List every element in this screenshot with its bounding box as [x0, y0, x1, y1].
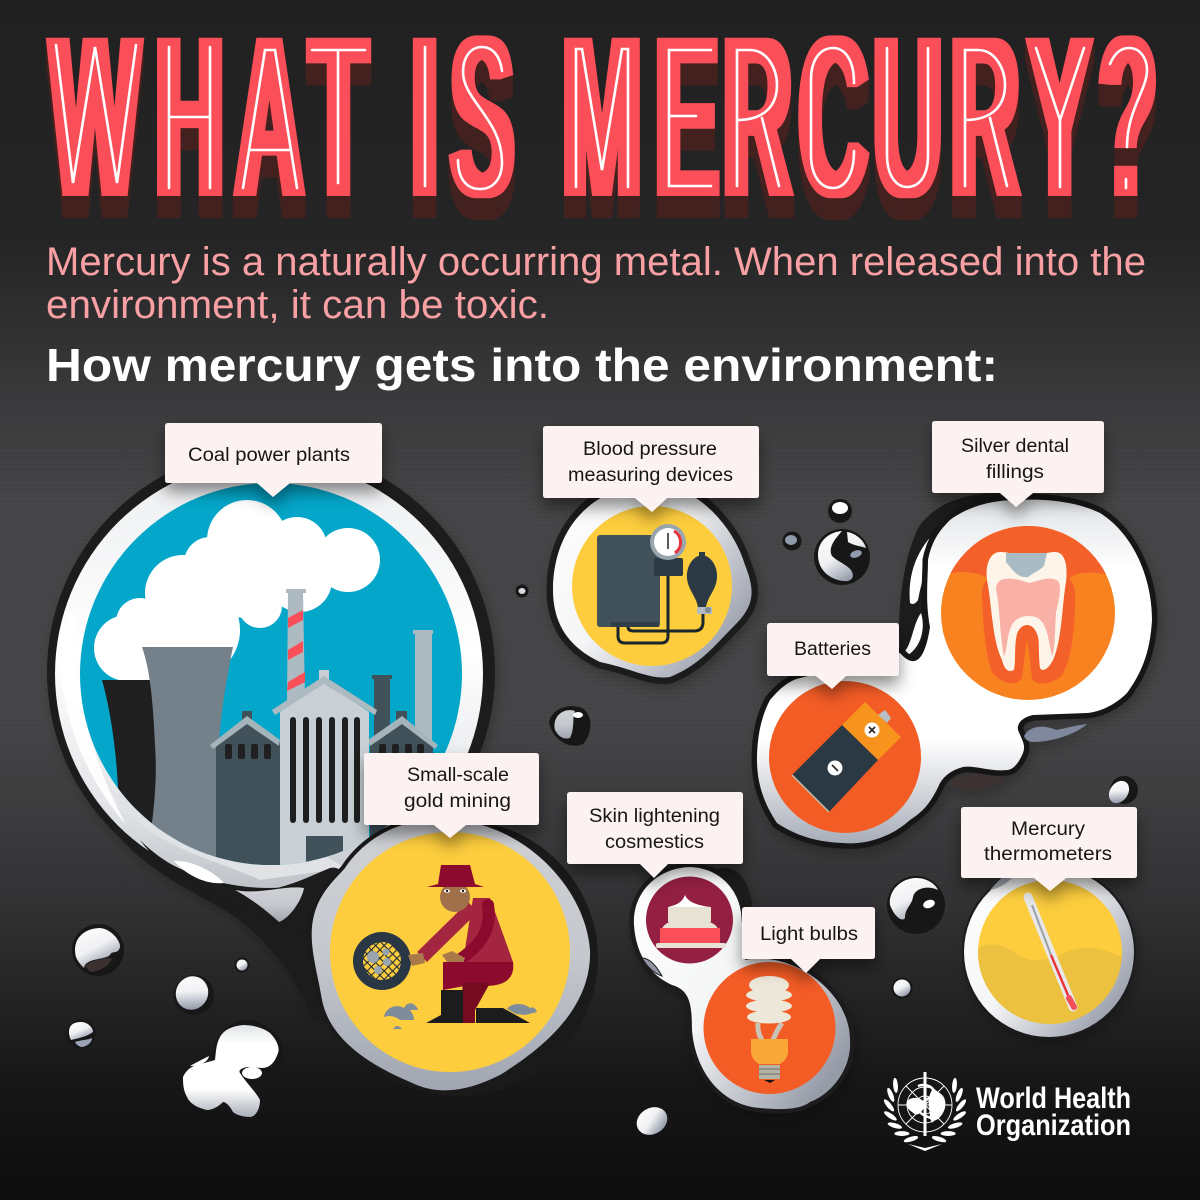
intro text [46, 240, 1146, 327]
icon: thermometer [975, 880, 1125, 1030]
mercury blob: blood pressure [553, 482, 752, 677]
intro text: Mercury is a naturally occurring metal. When released into the [46, 240, 1146, 284]
icon: battery [769, 681, 921, 833]
icon: tooth [941, 526, 1115, 700]
icon: blood pressure monitor [572, 506, 732, 666]
pan [353, 932, 411, 990]
panel: mercury thermometers [961, 807, 1137, 1039]
callout: skin lightening: Skin lightening [589, 806, 720, 827]
callout: coal power plants: Coal power plants [188, 445, 350, 466]
droplet: splat [183, 1020, 283, 1117]
panel: coal power plants [47, 423, 495, 1020]
callout: gold mining: gold mining [404, 791, 511, 812]
callout: silver fillings [932, 421, 1104, 507]
callout: blood pressure: Blood pressure [583, 439, 717, 460]
callout: thermometers [961, 807, 1137, 891]
icon: light bulb [704, 962, 836, 1094]
subheading: How mercury gets into the environment: [46, 339, 998, 391]
callout: light bulbs: Light bulbs [760, 924, 858, 945]
wordmark: World Health [976, 1082, 1131, 1115]
emblem [882, 1072, 968, 1151]
panel: small-scale gold mining [312, 753, 598, 1096]
callout: silver fillings: Silver dental [961, 436, 1069, 457]
callout: gold mining: Small-scale [407, 765, 509, 786]
mercury blob: tooth and battery [757, 492, 1152, 843]
rocks [384, 1003, 537, 1029]
droplet: S swirl [818, 531, 866, 581]
callout: skin lightening [567, 792, 743, 878]
icon: coal power plant [80, 483, 462, 880]
mercury blob: cosmetics and bulb [634, 867, 850, 1109]
callout: light bulbs [742, 907, 875, 973]
panel: cosmetics and light bulbs [567, 792, 875, 1109]
callout: thermometers: thermometers [984, 844, 1112, 865]
callout: skin lightening: cosmestics [605, 832, 704, 853]
callout: blood pressure: measuring devices [568, 465, 733, 486]
panel: blood pressure devices [543, 426, 759, 677]
droplet: swirl [890, 878, 938, 919]
mercury blob: thermometer [962, 865, 1136, 1039]
callout: thermometers: Mercury [1011, 819, 1086, 840]
callout: batteries: Batteries [794, 639, 871, 660]
WHO logo [882, 1072, 1131, 1151]
icon: face cream jar [646, 876, 733, 964]
wordmark [976, 1082, 1131, 1142]
intro text: environment, it can be toxic. [46, 283, 549, 327]
callout: gold mining [364, 753, 539, 838]
mercury blob: coal [47, 448, 495, 1020]
icon: gold miner [330, 832, 570, 1072]
callout: silver fillings: fillings [986, 462, 1044, 483]
wordmark: Organization [976, 1109, 1131, 1142]
callout: coal power plants [165, 423, 382, 497]
mercury blob: gold [312, 819, 598, 1096]
panel: dental fillings and batteries [757, 421, 1152, 843]
smoke cloud [94, 500, 380, 681]
callout: batteries [767, 623, 899, 689]
mercury droplets [66, 499, 1138, 1140]
callout: blood pressure [543, 426, 759, 512]
